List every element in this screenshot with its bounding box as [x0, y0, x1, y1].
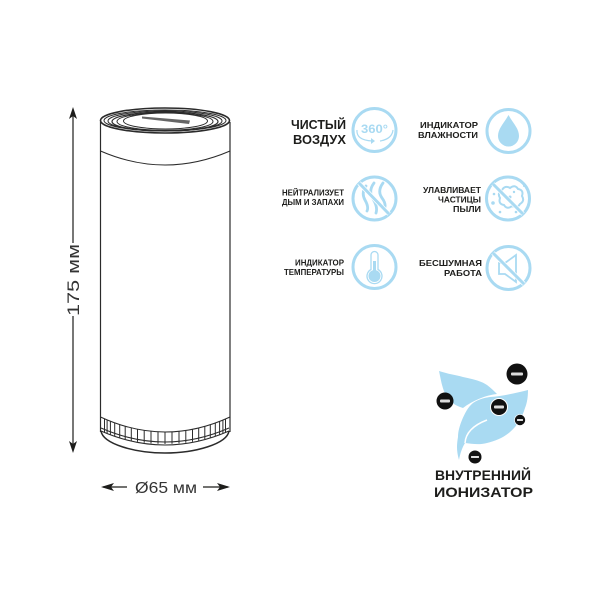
height label: 175 мм: [65, 244, 83, 316]
feature: clean air: [291, 117, 347, 147]
icon: negative ion center: [490, 398, 508, 416]
feature: humidity label: ВЛАЖНОСТИ: [418, 130, 478, 140]
top cap with rings: [100, 108, 230, 133]
ribbed base: [100, 417, 230, 453]
diameter dimension arrows: [101, 483, 230, 491]
ionizer illustration: leaves and negative ions: [436, 364, 528, 464]
leaf vein: [465, 420, 487, 443]
ionizer label: [434, 466, 533, 500]
feature: temperature label: [284, 258, 344, 277]
feature: clean air: ВОЗДУХ: [293, 133, 347, 147]
icon: water drop: [487, 110, 530, 152]
feature: catches dust label: ЧАСТИЦЫ: [438, 194, 481, 204]
feature: clean air: ЧИСТЫЙ: [291, 117, 346, 132]
icon: negative ion large: [506, 364, 528, 384]
height dimension arrow: [69, 107, 77, 453]
product drawing: cylinder air purifier: [100, 108, 230, 453]
feature: catches dust label: [423, 185, 481, 214]
icon: crossed smoke: [353, 177, 396, 220]
feature: temperature label: ТЕМПЕРАТУРЫ: [284, 267, 344, 277]
icon: negative ion left: [436, 392, 454, 410]
icon: back leaf: [439, 371, 497, 408]
icon: 360 degrees: [353, 108, 396, 152]
icon: negative ion right: [514, 414, 526, 426]
ionizer label: ИОНИЗАТОР: [434, 484, 533, 500]
feature: silent label: БЕСШУМНАЯ: [419, 258, 482, 268]
feature: humidity label: [418, 120, 479, 140]
icon: crossed dust: [486, 177, 530, 220]
feature: humidity label: ИНДИКАТОР: [420, 120, 479, 130]
icon: front leaf: [457, 390, 528, 460]
feature: catches dust label: ПЫЛИ: [453, 204, 481, 214]
icon: negative ion bottom: [468, 450, 482, 464]
feature: neutralizes smoke label: ДЫМ И ЗАПАХИ: [282, 198, 344, 207]
feature: neutralizes smoke label: НЕЙТРАЛИЗУЕТ: [282, 188, 344, 198]
feature: silent label: [419, 258, 482, 278]
diameter label: Ø65 мм: [135, 480, 197, 497]
feature: catches dust label: УЛАВЛИВАЕТ: [423, 185, 481, 195]
feature: silent label: РАБОТА: [444, 268, 482, 278]
ionizer label: ВНУТРЕННИЙ: [435, 466, 531, 483]
icon: thermometer: [353, 246, 396, 288]
icon: 360 degrees: 360°: [361, 122, 388, 136]
feature: neutralizes smoke label: [282, 188, 344, 207]
feature: temperature label: ИНДИКАТОР: [295, 258, 344, 268]
icon: crossed speaker: [487, 246, 530, 290]
